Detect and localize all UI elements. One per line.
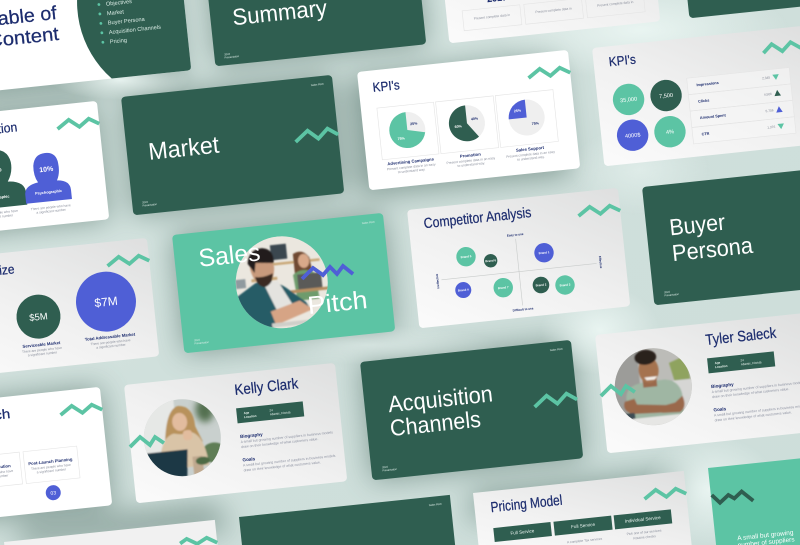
brand bubbles: Brand 3: [559, 282, 571, 288]
KPI table: CTR: [701, 132, 710, 137]
metric circles: 7,500: [659, 93, 673, 100]
circle: total addressable market: [73, 269, 141, 351]
heading: pitch: Pitch: [306, 286, 369, 320]
step: post-launch planning: a significant number: [36, 467, 67, 474]
step number 03: 03: [50, 490, 57, 497]
pie: sales support: [507, 98, 546, 137]
slide: market segmentation: [0, 101, 109, 241]
slide: acquisition channels: [360, 340, 583, 480]
brand bubbles: Brand 7: [498, 285, 509, 290]
heading: Pricing Model: [490, 493, 563, 516]
heading: acquisition channels: Channels: [389, 406, 482, 441]
biography: A small but growing number of suppliers in business models: [240, 430, 333, 444]
slide: summary: [203, 0, 426, 66]
slide: bottom dark partial: [239, 495, 455, 545]
biography: draw on their knowledge of what customers value.: [241, 437, 319, 449]
step number 03: [45, 484, 61, 501]
footer label: 2024: [382, 465, 389, 469]
partial table frame: Present complete data in: [535, 6, 572, 14]
contents list: Buyer Persona: [108, 17, 146, 27]
heading: acquisition channels: Acquisition: [387, 380, 494, 417]
pie captions: Advertising Campaigns: [387, 156, 435, 166]
brand bubbles: Brand 5: [460, 254, 472, 259]
heading: KPI's: [372, 77, 401, 95]
info band: Atlantic, Florida: [270, 410, 291, 416]
icon: blue person psychographic: 10%: [39, 166, 54, 174]
zigzag: [528, 66, 570, 78]
axis labels: Effective: [598, 256, 603, 269]
slide: top white partial: [437, 0, 660, 43]
pie: advertising campaigns: 75%: [397, 136, 406, 141]
info band: Location: [244, 414, 257, 419]
axis labels: Easy to use: [507, 232, 524, 238]
metric circles: 4%: [666, 129, 674, 136]
slide: KPI metrics: [592, 26, 800, 166]
goals: A small but growing number of suppliers in business models: [243, 454, 336, 467]
KPI table: 5,706: [765, 108, 774, 113]
slide: table of content: [0, 0, 191, 92]
zigzag: [57, 117, 99, 129]
slide: sales pitch cover: [172, 213, 395, 353]
step: execution: [0, 452, 23, 490]
slide: market: [121, 75, 344, 215]
partial table frame: Present complete data in: [474, 13, 510, 21]
pie captions: to understand way.: [517, 155, 545, 162]
footer label: 2024: [664, 290, 671, 294]
pie: promotion: [447, 104, 487, 143]
body text: A small but growing: [737, 529, 794, 542]
circle: serviceable market: a significant number: [28, 350, 58, 357]
pie: promotion: 40%: [471, 117, 479, 121]
axis labels: Difficult to use: [512, 306, 534, 312]
column text: [567, 528, 663, 545]
KPI table: 2,345: [762, 76, 770, 80]
brand bubbles: Brand 6: [485, 258, 497, 263]
goals: draw on their knowledge of what customers value.: [243, 460, 321, 472]
column text: Pick one of our services: [626, 528, 662, 536]
pie: promotion: 60%: [454, 124, 463, 129]
panel: dark rounded contents area: [72, 0, 191, 81]
brand bubbles: Brand 2: [535, 282, 547, 288]
circle: total addressable market: Total Addressable Market: [85, 332, 136, 342]
header label: Sales Pitch: [362, 220, 375, 225]
zigzag: [763, 41, 800, 53]
info band: [236, 401, 304, 423]
heading: buyer persona: Buyer: [668, 209, 727, 240]
zigzag: [107, 254, 149, 266]
heading: sales: Sales: [197, 238, 262, 273]
slide: bottom left partial: [4, 520, 217, 545]
zigzag: [60, 403, 102, 415]
biography: draw on their knowledge of what customers value.: [712, 387, 790, 399]
KPI table: Clicks: [698, 99, 710, 104]
KPI table: Amount Spent: [700, 113, 727, 120]
slide: pricing model: [473, 471, 692, 545]
KPI table: 4,506: [764, 92, 772, 97]
photo: woman at laptop: [144, 399, 221, 476]
biography: [240, 424, 334, 449]
slide: top right dark partial: [677, 0, 800, 18]
zigzag: [644, 487, 686, 499]
pie: advertising campaigns: [388, 110, 427, 150]
name heading: Tyler Saleck: [705, 325, 778, 349]
metric circles: 4000$: [625, 132, 642, 140]
pricing column headers: Individual Service: [625, 515, 661, 524]
footer label: Presentation: [382, 467, 398, 472]
header label: Sales Pitch: [311, 82, 324, 87]
goals: [713, 398, 800, 422]
circle: serviceable market: $5M: [29, 311, 48, 324]
circle: serviceable market: [14, 292, 64, 358]
slide: market size: [0, 238, 159, 378]
partial table frame: [462, 0, 645, 31]
pie captions: Present complete data in an easy: [506, 150, 555, 159]
pie captions: to understand way.: [457, 161, 485, 168]
axis labels: Ineffective: [435, 273, 440, 289]
goals: [242, 448, 336, 472]
circle: total addressable market: $7M: [94, 294, 118, 310]
footer label: Presentation: [142, 202, 158, 208]
slide: buyer persona: [642, 165, 800, 305]
info band: Age: [714, 361, 721, 365]
captions: There are people who have: [31, 203, 71, 211]
footer label: Presentation: [224, 54, 240, 60]
circle: serviceable market: There are people who have: [22, 346, 62, 354]
contents list: [97, 0, 162, 46]
goals: Goals: [713, 406, 727, 413]
brand bubbles: [451, 236, 576, 306]
captions: a significant number: [36, 208, 67, 215]
pie captions: to understand way.: [398, 167, 426, 174]
pricing column headers: [493, 509, 672, 542]
pie captions: Promotion: [460, 151, 481, 159]
footer label: 2024: [224, 52, 231, 56]
pie captions: Present complete data in an easy: [387, 162, 436, 171]
step: post-launch planning: [23, 446, 80, 484]
pricing column headers: Full Service: [571, 522, 596, 529]
icon: blue person psychographic: Psychographic: [35, 189, 62, 196]
heading: KPI's: [608, 51, 637, 69]
biography: Biography: [240, 432, 263, 439]
pie: sales support: 75%: [532, 121, 540, 126]
pie: advertising campaigns: 25%: [410, 121, 418, 126]
footer label: Presentation: [194, 340, 210, 345]
slide: kelly clark persona: [124, 363, 347, 503]
footer label: 2024: [194, 338, 201, 342]
photo: man and woman in office: [236, 236, 328, 328]
KPI table: [687, 68, 796, 144]
column text: Routine checks: [633, 534, 656, 540]
KPI table: Impressions: [696, 81, 719, 87]
brand bubbles: Brand 4: [458, 287, 469, 293]
axis labels: [431, 224, 607, 320]
zigzag: [600, 384, 635, 396]
heading: buyer persona: Persona: [671, 232, 754, 266]
pie captions: Sales Support: [516, 145, 545, 153]
goals: Goals: [242, 456, 256, 463]
zigzag: [180, 536, 217, 545]
matrix axes: [438, 231, 600, 314]
zigzag: [295, 128, 338, 142]
slide: competitor analysis: [407, 188, 630, 328]
icon: dark person demographic: [0, 147, 27, 211]
info band: 24: [740, 358, 744, 362]
column text: A complete Tax services: [567, 537, 603, 544]
pie captions: Present complete data in an easy: [446, 156, 496, 165]
photo: man at laptop: [614, 348, 692, 426]
header label: Sales Pitch: [429, 502, 442, 507]
step: post-launch planning: Post-Launch Planning: [28, 457, 73, 466]
info band: Atlantic, Florida: [741, 360, 762, 366]
frames: [377, 90, 558, 160]
circle: total addressable market: a significant number: [96, 343, 127, 350]
partial table frame: Present complete data in: [597, 0, 634, 8]
info band: Age: [243, 411, 250, 415]
metric circles: 35,000: [620, 97, 638, 104]
info band: 24: [269, 408, 273, 412]
slide: green bottom right: [708, 446, 800, 545]
brand bubbles: Brand 1: [538, 250, 550, 255]
slide: product launch: [0, 387, 112, 527]
pie: sales support: 25%: [514, 108, 522, 113]
slide: KPI pie charts: [357, 50, 580, 190]
contents list: Acquisition Channels: [109, 25, 161, 36]
zigzag: [578, 204, 620, 216]
info band: Location: [715, 364, 728, 369]
slide: tyler saleck persona: [595, 313, 800, 453]
zigzag: [534, 393, 577, 407]
pricing column headers: Full Service: [510, 528, 535, 536]
footer label: 2024: [142, 200, 149, 204]
contents list: Market: [107, 9, 125, 17]
icon: blue person psychographic: [21, 151, 72, 204]
info band: [707, 351, 775, 373]
captions: [0, 203, 71, 221]
header label: Sales Pitch: [550, 347, 563, 352]
KPI table: 1,376: [767, 125, 776, 130]
metric circles: [611, 78, 687, 153]
zigzag: [301, 264, 353, 279]
pie captions: [386, 144, 556, 175]
circle: total addressable market: There are people who have: [90, 338, 131, 346]
zigzag: [129, 435, 164, 447]
goals: draw on their knowledge of what customers value.: [714, 410, 792, 422]
zigzag: [712, 490, 753, 505]
name heading: Kelly Clark: [234, 375, 300, 399]
heading: Competitor Analysis: [423, 205, 532, 232]
biography: [711, 374, 800, 399]
circle: serviceable market: Serviceable Market: [22, 340, 61, 349]
footer label: Presentation: [664, 292, 680, 297]
step: post-launch planning: There are people who have: [31, 463, 71, 471]
heading: market: Market: [147, 132, 221, 166]
contents list: Pricing: [110, 38, 127, 46]
biography: Biography: [711, 382, 734, 389]
